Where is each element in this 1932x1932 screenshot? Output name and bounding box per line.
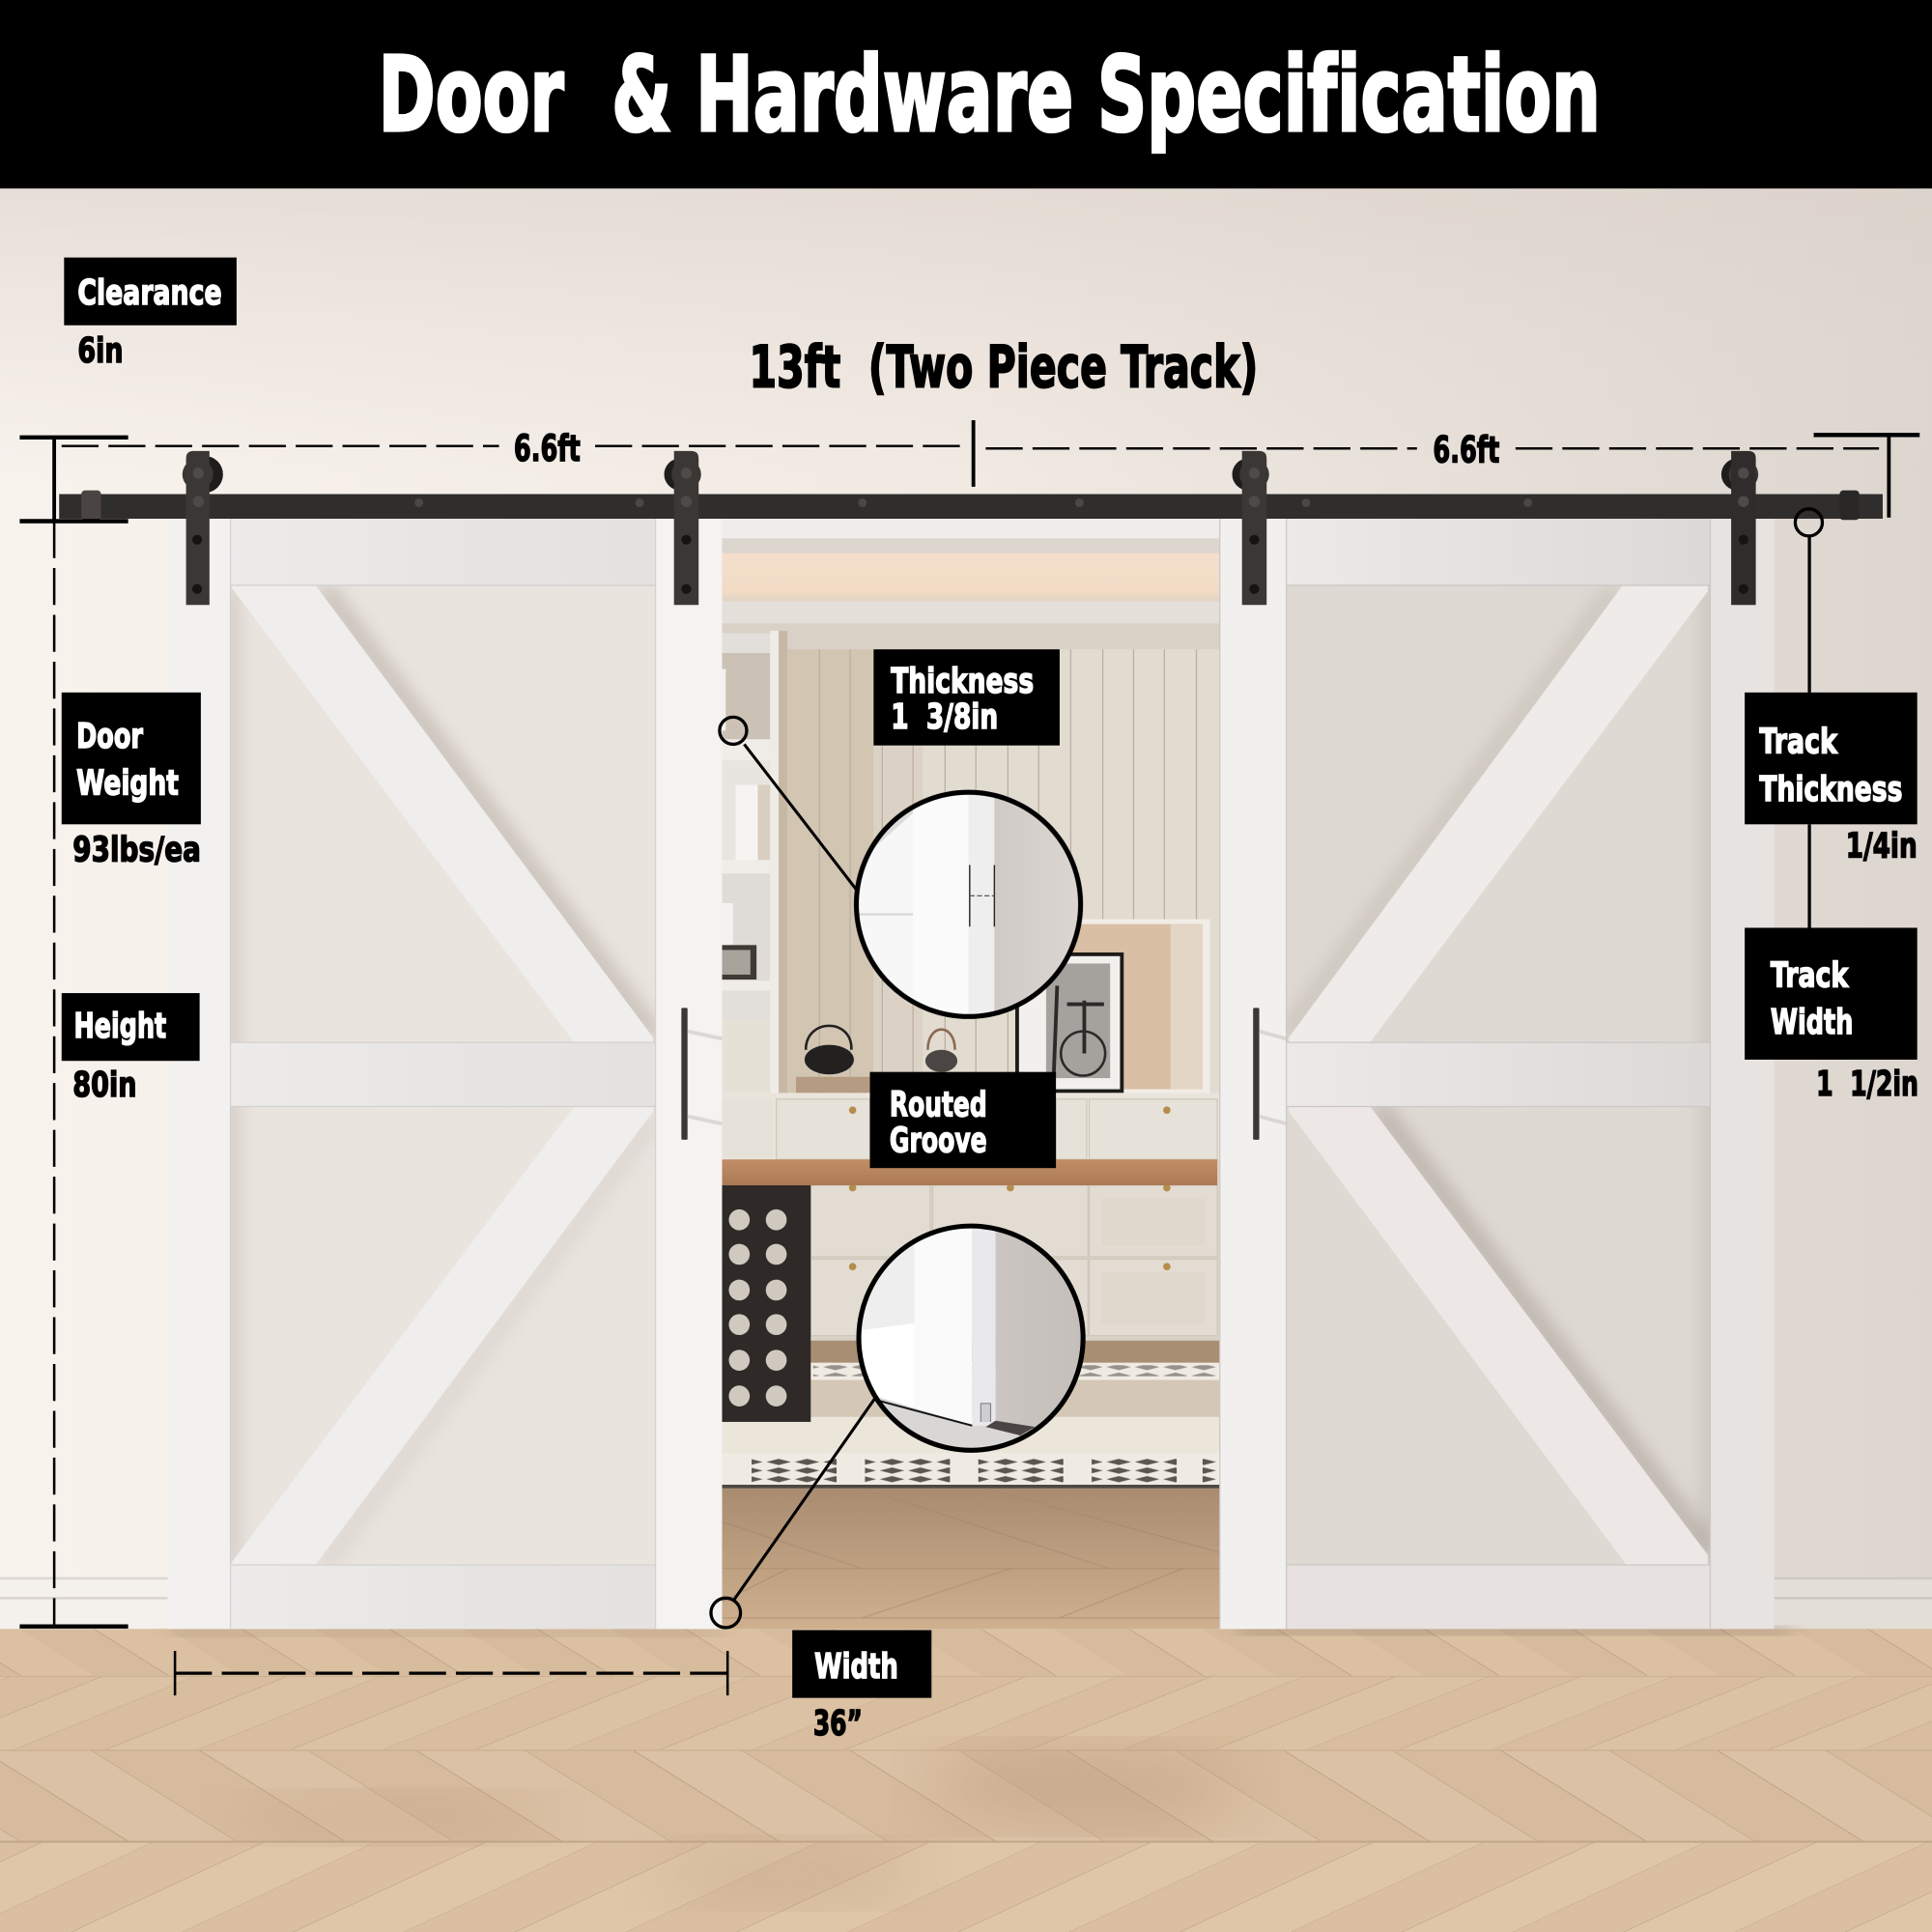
clearance value: 6in <box>77 331 124 371</box>
hanger 1 <box>183 451 223 605</box>
label: track thickness <box>1745 693 1918 824</box>
label: door weight <box>62 693 201 824</box>
callout leaders <box>711 509 1822 1628</box>
right span label: 6.6ft <box>1433 429 1499 470</box>
hanger straps <box>183 451 1758 605</box>
framed art and bicycle photo <box>1015 920 1210 1094</box>
rug and floor <box>722 1341 1220 1629</box>
perforated black table leg <box>722 1185 810 1422</box>
hanger 2 <box>665 451 701 605</box>
label: track width <box>1745 927 1918 1060</box>
left barn door <box>167 519 722 1629</box>
track length dimension lines <box>62 420 1919 518</box>
cabinets <box>722 1093 1220 1341</box>
kettles on tray <box>796 1026 957 1093</box>
magnifier: routed groove <box>850 1220 1088 1454</box>
width value: 36” <box>813 1704 863 1744</box>
hanger 3 <box>1233 451 1269 605</box>
interior room seen through the opening <box>722 519 1220 1629</box>
label: routed groove: Groove <box>890 1122 987 1161</box>
magnifier: door thickness <box>850 788 1087 1023</box>
track rail <box>59 491 1883 520</box>
label: door weight: Weight <box>76 764 179 804</box>
hanger 4 <box>1721 451 1758 605</box>
label: clearance: Clearance <box>77 273 222 313</box>
left span label: 6.6ft <box>514 428 581 469</box>
beadboard wall <box>787 649 1220 1099</box>
label: width <box>792 1631 931 1698</box>
label: track width: Track <box>1771 956 1849 996</box>
label: height: Height <box>74 1007 166 1046</box>
herringbone wood floor <box>0 1627 1932 1932</box>
shelf unit <box>722 631 787 1094</box>
height value: 80in <box>72 1065 137 1105</box>
label: track width: Width <box>1771 1003 1853 1042</box>
label: track thickness: Track <box>1759 722 1838 761</box>
label: clearance <box>64 258 237 326</box>
label: thickness: Thickness <box>891 662 1034 701</box>
label: routed groove: Routed <box>890 1086 987 1125</box>
label: routed groove <box>870 1072 1056 1168</box>
label: thickness: 1 3/8in <box>891 697 998 737</box>
label: thickness <box>873 649 1060 746</box>
right barn door <box>1220 519 1775 1629</box>
title banner <box>0 0 1932 188</box>
label: height <box>62 993 200 1061</box>
height dimension line <box>19 438 128 1627</box>
door width dimension line <box>175 1651 727 1695</box>
door handles <box>681 1008 1287 1140</box>
label: door weight: Door <box>76 717 143 756</box>
label: width: Width <box>814 1647 898 1687</box>
wood counter top <box>722 1159 1217 1185</box>
track length heading: 13ft (Two Piece Track) <box>750 334 1258 402</box>
door weight value: 93lbs/ea <box>72 831 201 870</box>
wall background <box>0 188 1932 1630</box>
